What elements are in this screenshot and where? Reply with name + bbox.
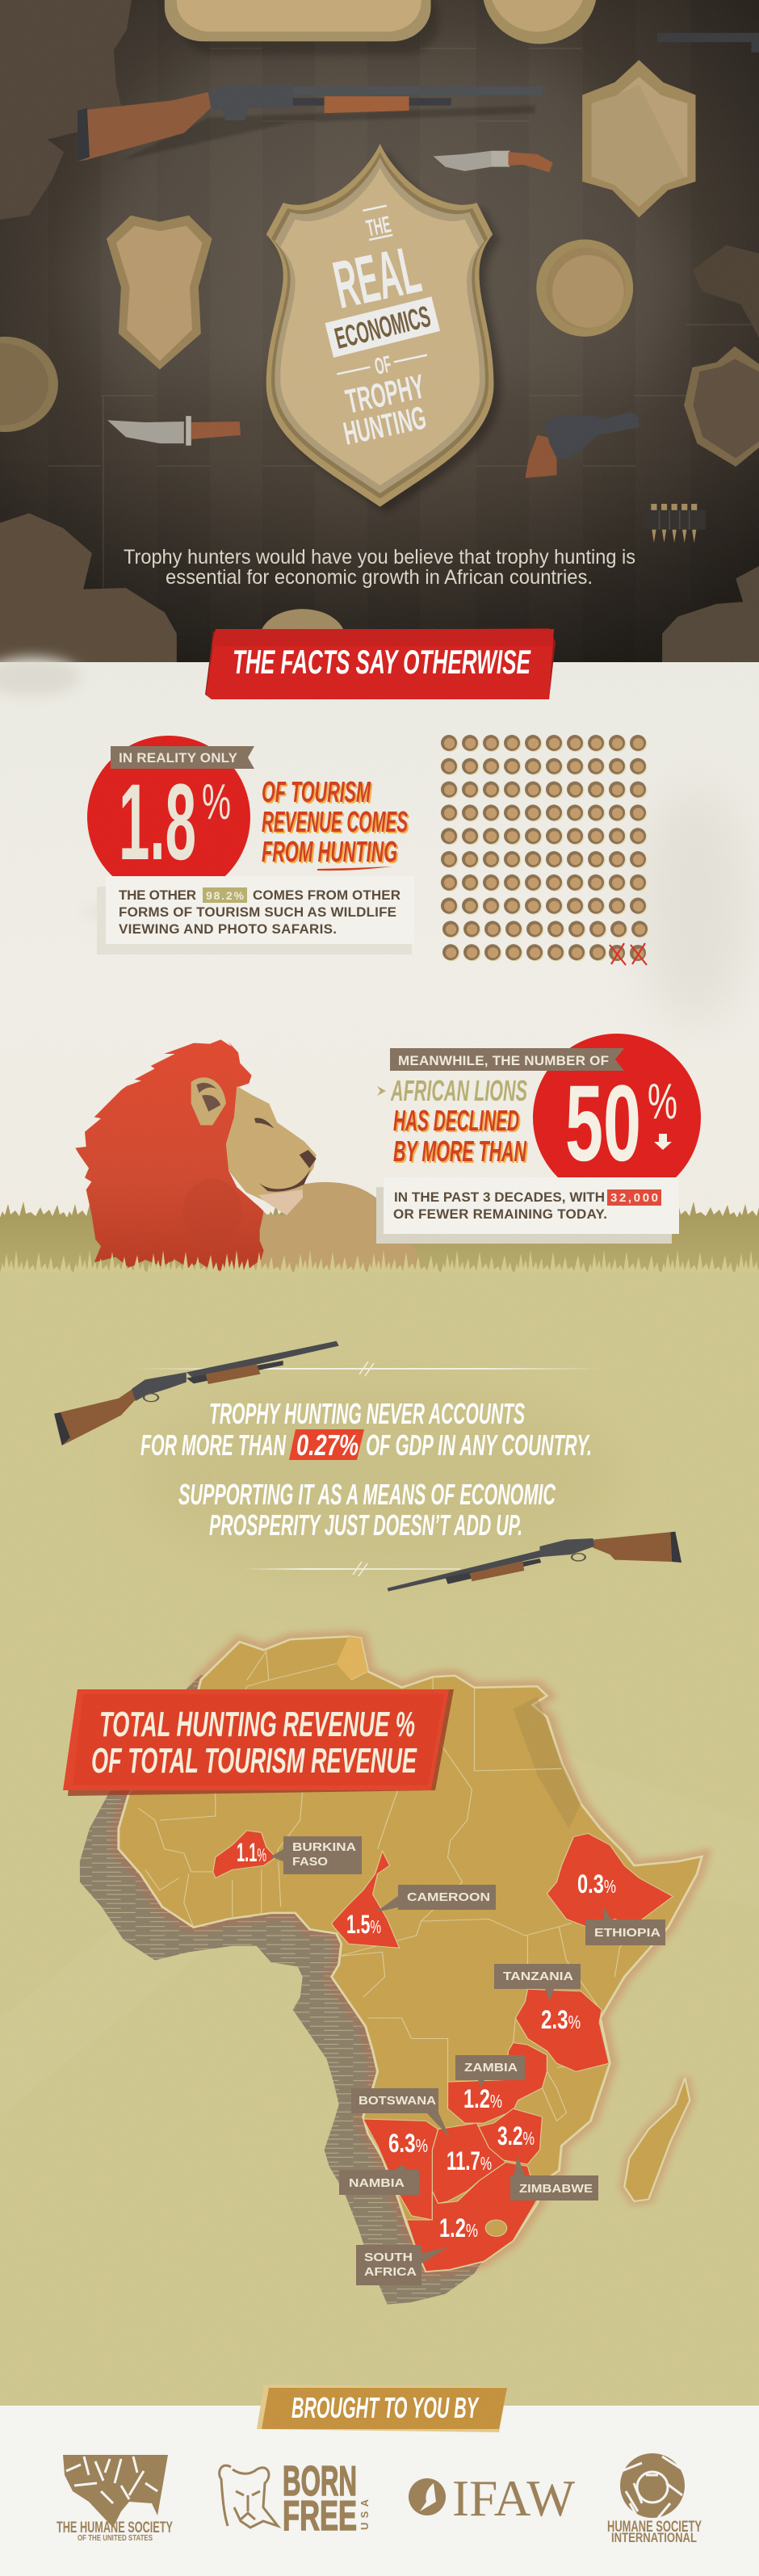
red circle: [87, 736, 250, 899]
map shadow: [80, 1669, 663, 2305]
percent values: 1.2%: [439, 2213, 478, 2242]
logo: Born Free USA: USA: [359, 2498, 371, 2530]
title word: THE: THE: [364, 212, 393, 242]
number: 50: [565, 1064, 641, 1184]
heading: of tourism revenue comes from hunting: REVENUE COMES: [262, 805, 408, 838]
country: Ethiopia: [547, 1833, 673, 1928]
wooden planks: [48, 0, 759, 664]
lion face: [226, 1086, 317, 1215]
label: Tanzania: TANZANIA: [503, 1970, 573, 1983]
banner: total hunting revenue: OF TOTAL TOURISM REVENUE: [91, 1741, 417, 1781]
highlighted countries: [213, 1831, 673, 2272]
trophy wall objects: [0, 0, 759, 666]
background grass: [0, 1200, 759, 1276]
percent values: 11.7%: [447, 2146, 492, 2175]
plaque: top circle: [483, 0, 597, 44]
lion mane shading: [183, 1179, 242, 1244]
country: Tanzania: [515, 1989, 609, 2071]
label: Cameroon: [375, 1885, 496, 1912]
country: Namibia: [363, 2119, 438, 2220]
text box: IN THE PAST 3 DECADES, WITH: [394, 1189, 605, 1205]
text box: FORMS OF TOURISM SUCH AS WILDLIFE: [119, 904, 396, 920]
icon: down arrow: [654, 1134, 672, 1150]
lion body: [253, 1182, 430, 1282]
label: Ethiopia: [585, 1907, 665, 1945]
country: South Africa: [407, 2163, 537, 2272]
label: Botswana: [351, 2088, 450, 2138]
foreground grass: [0, 1248, 759, 2406]
plaque: left circle: [0, 337, 58, 432]
heading: of tourism revenue comes from hunting: [262, 775, 409, 871]
percent values: 6.3%: [388, 2129, 428, 2158]
labels: [270, 1836, 665, 2285]
number: %: [648, 1074, 677, 1130]
panel: hero wood wall: [0, 0, 759, 666]
heading: african lions has declined by more than: HAS DECLINED: [395, 1105, 521, 1139]
label: Zimbabwe: ZIMBABWE: [519, 2182, 593, 2196]
red circle: [533, 1034, 701, 1202]
percent values: 2.3%: [541, 2005, 581, 2034]
percent values: 1.2%: [463, 2084, 502, 2113]
country: Zambia: [448, 2043, 547, 2123]
title word: REAL: REAL: [327, 232, 426, 323]
knife: upper: [434, 151, 553, 172]
continent: [119, 1637, 702, 2272]
divider: top: [131, 1361, 602, 1376]
ribbon: meanwhile: [390, 1048, 624, 1071]
banner: brought to you by: [257, 2385, 507, 2432]
text box: VIEWING AND PHOTO SAFARIS.: [119, 921, 337, 937]
country: Burkina Faso: [213, 1831, 276, 1878]
plaque: bottom circle: [260, 609, 345, 666]
text box: 32,000: [610, 1191, 658, 1205]
tunisia tone: [337, 1637, 368, 1680]
heading: african lions has declined by more than: BY MORE THAN: [395, 1136, 529, 1169]
heading: of tourism revenue comes from hunting: OF TOURISM: [263, 777, 373, 810]
panel: sponsors footer: [0, 2385, 759, 2576]
map: Africa: [80, 1637, 702, 2305]
label: South Africa: AFRICA: [364, 2265, 417, 2279]
chart: 100 dots with 2 crossed out: [438, 732, 650, 965]
label: Burkina Faso: BURKINA: [292, 1840, 356, 1854]
banner: total hunting revenue: [63, 1689, 454, 1796]
label: Burkina Faso: [270, 1836, 362, 1874]
number: 1.8: [119, 762, 196, 883]
percent values: 1.5%: [346, 1910, 381, 1939]
label: South Africa: SOUTH: [364, 2251, 413, 2264]
text box: OR FEWER REMAINING TODAY.: [393, 1206, 607, 1222]
percent values: 3.2%: [497, 2121, 535, 2150]
text box: COMES FROM OTHER: [253, 887, 400, 903]
text: trophy hunting never accounts: TROPHY HUNTING NEVER ACCOUNTS: [209, 1397, 525, 1430]
shield title: [325, 204, 440, 452]
label: South Africa: [356, 2245, 448, 2285]
main shield: [266, 144, 501, 513]
rifle: on wall: [78, 85, 543, 162]
tagline: [124, 546, 635, 589]
logo: The Humane Society of the United States: THE HUMANE SOCIETY: [57, 2519, 173, 2536]
label: Ethiopia: ETHIOPIA: [594, 1926, 660, 1940]
banner: the facts say otherwise: THE FACTS SAY OTHERWISE: [233, 643, 531, 681]
logo: Humane Society International: INTERNATIONAL: [611, 2530, 697, 2545]
logo: Humane Society International: [607, 2453, 702, 2545]
title banner: ECONOMICS: [325, 296, 440, 358]
label: Burkina Faso: FASO: [292, 1855, 328, 1869]
title word: OF: OF: [372, 351, 394, 380]
logo: Born Free USA: FREE: [283, 2493, 357, 2540]
heading: of tourism revenue comes from hunting: OF TOURISM: [262, 775, 371, 808]
logo: Born Free USA: [220, 2458, 371, 2540]
title banner: ECONOMICS: ECONOMICS: [332, 300, 434, 355]
divider: bottom: [242, 1562, 460, 1576]
label: Namibia: NAMBIA: [349, 2176, 405, 2190]
text box: [97, 876, 414, 954]
logo: IFAW: IFAW: [452, 2470, 576, 2527]
silhouette: top left animal shadow: [0, 0, 132, 220]
label: Zimbabwe: [510, 2156, 598, 2201]
banner: the facts say otherwise: [205, 628, 556, 699]
lion ear: [191, 1077, 226, 1125]
darker diagonal band: [513, 1697, 581, 1828]
percent values: 0.3%: [577, 1869, 616, 1898]
title word: THE: [363, 204, 393, 242]
illustration: lion: [75, 1039, 430, 1282]
heading: of tourism revenue comes from hunting: REVENUE COMES: [263, 807, 409, 840]
title word: OF: [334, 344, 430, 388]
plaque: right shield: [582, 60, 695, 217]
plaque: right circle: [536, 240, 633, 337]
plaque: top rounded: [165, 0, 438, 55]
text: supporting it: PROSPERITY JUST DOESN’T ADD UP.: [209, 1508, 522, 1542]
text: trophy hunting never accounts: [140, 1397, 592, 1462]
text: trophy hunting never accounts: OF GDP IN ANY COUNTRY.: [366, 1429, 592, 1462]
number: %: [202, 774, 231, 830]
icon: small arrow: [377, 1086, 386, 1096]
logo: The Humane Society of the United States: OF THE UNITED STATES: [78, 2534, 153, 2543]
label: Zambia: [455, 2055, 525, 2087]
rifle: tan section upper: [54, 1341, 339, 1445]
label: Botswana: BOTSWANA: [359, 2094, 436, 2108]
silhouette: bottom left animal shadow: [0, 513, 177, 665]
text box: [376, 1177, 679, 1244]
country: Cameroon: [332, 1851, 400, 1948]
title word: HUNTING: HUNTING: [341, 400, 430, 452]
banner: brought to you by: BROUGHT TO YOU BY: [291, 2391, 480, 2424]
ribbon: meanwhile: MEANWHILE, THE NUMBER OF: [398, 1053, 609, 1068]
percent values: 1.1%: [237, 1838, 266, 1867]
text: supporting it: [178, 1478, 556, 1542]
ribbon: in reality only: IN REALITY ONLY: [119, 750, 238, 766]
label: Namibia: [339, 2164, 419, 2195]
spotlight glow: [65, 57, 694, 388]
label: Tanzania: [494, 1964, 581, 2001]
heading: of tourism revenue comes from hunting: FROM HUNTING: [262, 835, 397, 868]
plaque: right partial shield: [684, 346, 759, 467]
text: trophy hunting never accounts: FOR MORE THAN: [140, 1429, 287, 1462]
logo: Born Free USA: BORN: [283, 2458, 357, 2505]
text box: THE OTHER: [119, 887, 196, 903]
logo: The Humane Society of the United States: [57, 2455, 173, 2543]
logo: Humane Society International: HUMANE SOCIETY: [607, 2519, 702, 2536]
country: Botswana: [432, 2123, 505, 2204]
tagline: essential for economic growth in African countries.: [166, 566, 593, 589]
madagascar: [624, 2078, 690, 2201]
tagline: Trophy hunters would have you believe that trophy hunting is: [124, 546, 635, 568]
ribbon: in reality only: [111, 746, 254, 769]
lion muzzle and chin fur: [258, 1189, 303, 1215]
country: Lesotho: [485, 2220, 507, 2236]
rifle: top right fragment: [657, 33, 759, 52]
label: Cameroon: CAMEROON: [407, 1890, 490, 1904]
country: Zimbabwe: [477, 2108, 542, 2164]
rifle: tan section lower: [388, 1532, 681, 1592]
plaque: left shield: [107, 216, 212, 370]
heading: african lions has declined by more than: AFRICAN LIONS: [390, 1074, 527, 1107]
lion mane: [75, 1039, 264, 1273]
bullets belt: [644, 504, 706, 543]
banner: total hunting revenue: TOTAL HUNTING REVENUE %: [99, 1705, 415, 1744]
stat: 50 percent lions: [376, 1034, 701, 1244]
heading: african lions has declined by more than: BY MORE THAN: [393, 1135, 527, 1168]
silhouette: right animal shadow: [692, 245, 759, 338]
text box: 98.2%: [206, 889, 245, 902]
heading: of tourism revenue comes from hunting: FROM HUNTING: [263, 837, 399, 870]
map red glow: [119, 1637, 702, 2272]
percent values: [237, 1838, 616, 2242]
knife: lower: [107, 416, 241, 446]
label: Zambia: ZAMBIA: [464, 2061, 518, 2075]
country borders: [138, 1651, 634, 2121]
revolver: [525, 412, 639, 478]
heading: african lions has declined by more than: HAS DECLINED: [393, 1104, 519, 1137]
heading: african lions has declined by more than: [390, 1074, 529, 1169]
stat: 1.8 percent: [87, 736, 414, 954]
panel: light stats section background: [0, 657, 759, 1292]
silhouette: bottom right animal shadow: [662, 566, 759, 665]
lion eye, nose and mouth: [254, 1118, 317, 1192]
title word: TROPHY: TROPHY: [342, 367, 428, 421]
text: trophy hunting never accounts: 0.27%: [296, 1429, 359, 1462]
